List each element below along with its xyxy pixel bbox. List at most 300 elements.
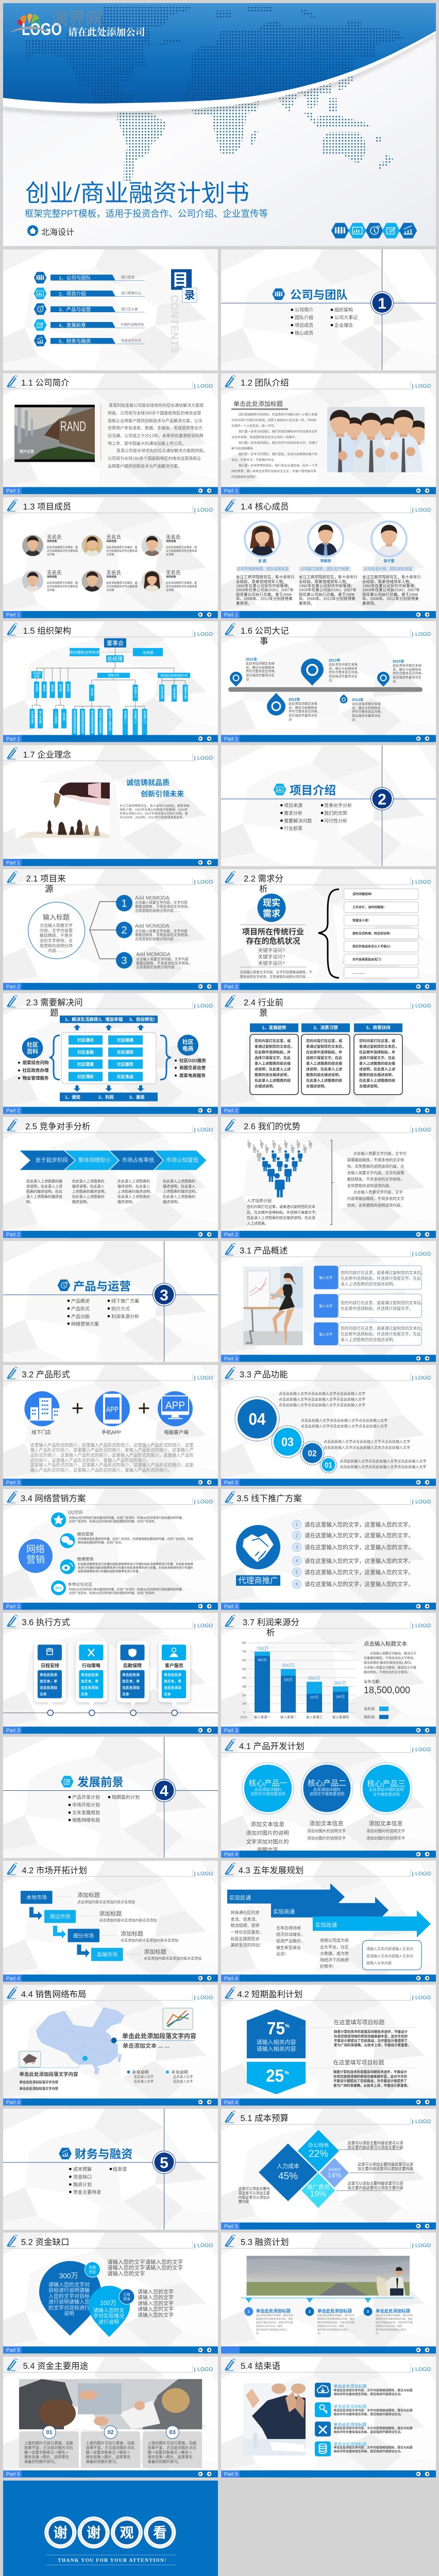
milestone text: 述，建议与标题相关 — [393, 668, 421, 672]
numbered list: 6 — [295, 1582, 298, 1587]
pain point boxes: ………… — [352, 972, 365, 975]
footer label: Part 2 — [224, 1108, 238, 1114]
column boxes: 录入上述图表的综合描 — [359, 1061, 395, 1066]
heading: 析 — [266, 1628, 275, 1638]
advantage text: 修饰，言简意赅的说明该项内容。 — [347, 1203, 404, 1208]
summary: 全年总额: — [364, 1679, 380, 1684]
member text: 议与标题相关并符合整体语 — [166, 549, 197, 553]
heading: 目录 — [171, 269, 197, 302]
panel: 3.4 online marketing — [3, 1489, 218, 1610]
logo label: LOGO — [415, 879, 431, 885]
heading: 5.4 资金主要用途 — [23, 2361, 88, 2371]
bar chart: 收入来源四 — [332, 1715, 349, 1719]
bar chart: 400 — [242, 1677, 246, 1680]
logo label: LOGO — [415, 2366, 431, 2372]
description boxes: 您的内容打在这里，或者通过复制您的文本后， — [341, 1270, 425, 1275]
step text: 单击此处添加标题 — [256, 2309, 291, 2314]
small pin: 100万 — [100, 2299, 116, 2307]
member text: 议与标题相关并符合整体语 — [166, 585, 197, 588]
large pin: 说明 — [64, 2310, 74, 2317]
logo label: LOGO — [415, 2119, 431, 2125]
panels: 键->设置对象格式->填充-> — [147, 2450, 192, 2455]
topic list: 产品开发计划 — [72, 1794, 100, 1800]
item text — [135, 895, 192, 970]
column text: 将使公司成为就 — [320, 1938, 349, 1943]
panel: 3.5 offline promotion — [221, 1489, 436, 1610]
column text: 促进产业融合， — [276, 1938, 305, 1943]
badge: 需求 — [263, 909, 280, 919]
note box: 请输入文本内容请输入文本内 — [366, 1946, 413, 1951]
org chart: 研发部 — [90, 688, 93, 697]
member avatars — [22, 535, 163, 591]
side text: 请输入您的文字 — [138, 2312, 174, 2318]
step text: 内。 — [256, 2332, 261, 2335]
column text: 催生新型商业 — [276, 1945, 301, 1950]
pain point boxes — [344, 889, 418, 978]
input bubble: 输入标题 — [43, 913, 70, 921]
step text: 添加标题 — [144, 1948, 166, 1955]
arrows: 实现商通 — [273, 1908, 295, 1915]
pain point boxes: 快递没人收! — [352, 918, 369, 922]
footer label: Part 4 — [224, 2100, 238, 2106]
column text: 业态! — [276, 1951, 285, 1956]
panels: 准备好的图片即可。 — [147, 2460, 181, 2464]
panels: 效果不变，方法是对图片点右 — [86, 2446, 134, 2450]
chevron process: 处于起步阶段 — [36, 1157, 68, 1163]
arrows: 实现民通 — [229, 1894, 251, 1901]
numbered list: 请在这里输入您的文字，这里输入您的文字。 — [305, 1532, 414, 1539]
descriptions: 图表的描述说明，在此 — [26, 1189, 62, 1194]
org chart: 营运部门② — [134, 710, 137, 724]
heading: 3.2 产品形式 — [22, 1369, 70, 1379]
topic list: 企业理念 — [334, 323, 353, 328]
logo label: LOGO — [197, 1375, 213, 1381]
member text: 议与标题相关并符合整体语 — [106, 549, 138, 553]
left column: 物业管理服务 — [23, 1076, 49, 1081]
names: 安 妮 — [258, 558, 266, 563]
cards: 文本 — [40, 1692, 47, 1697]
crisis text: 关键字设问? — [258, 947, 285, 954]
org chart: 营运部门③ — [143, 710, 146, 724]
topic list: 公司大事记 — [334, 314, 358, 320]
milestone text: 2012年 — [289, 697, 300, 702]
legend: · — [167, 2075, 168, 2079]
milestone text: 述，建议与标题相关 — [329, 667, 358, 671]
step text: 添加标题 — [121, 1930, 143, 1937]
logo label: LOGO — [197, 1499, 213, 1505]
timeline nodes — [47, 1710, 177, 1716]
feature text: 相关并符合整体语言风格，语言描述尽量简洁生动。 — [334, 2430, 403, 2434]
column text: 大数据，成为市 — [320, 1951, 349, 1956]
numbered list: 4 — [295, 1558, 298, 1563]
feature text: 单击此处添加文本内容，文字内容需概括精炼，建议与标题 — [334, 2409, 413, 2413]
left column: 社区政务办理 — [23, 1068, 49, 1073]
input bubble: 简意赅的说明分项 — [40, 943, 73, 948]
member text: 议与标题相关并符合整体语 — [106, 585, 138, 588]
footer label: Part 3 — [224, 1604, 238, 1609]
milestone text: 动 — [352, 718, 355, 722]
world map: upper dots — [26, 7, 403, 102]
panel: 2.6 advantages — [221, 1117, 436, 1238]
footer label: Part 2 — [224, 1232, 238, 1238]
talent plan text: 人才培养计划 — [247, 1198, 272, 1204]
legend — [364, 1706, 389, 1719]
footer label: Part 1 — [224, 488, 238, 494]
text columns: 说明文字 — [257, 1846, 278, 1853]
legend: 在此录入文字 — [173, 2074, 193, 2079]
panel: 4.1 product plan — [221, 1737, 436, 1858]
column text: 一体化社区服务， — [231, 1929, 264, 1935]
org chart: 特许授权合作伙伴 — [69, 650, 100, 655]
text columns: 添加对图片的说明 — [246, 1830, 289, 1837]
thank you badges: 谢 — [87, 2525, 100, 2540]
product circles: 核心产品二 — [308, 1779, 346, 1788]
portraits — [244, 520, 408, 557]
summary — [364, 1640, 416, 1696]
org chart: 采购部 — [51, 684, 54, 692]
footer label: Part 3 — [224, 1356, 238, 1362]
org chart: 前台事业部 — [31, 710, 34, 724]
cards: 加文本，单 — [40, 1679, 57, 1684]
text columns: 添加文本信息 — [369, 1820, 403, 1827]
thank you badges — [44, 2516, 176, 2548]
milestone text: 并符合整体语言风格， — [352, 709, 384, 714]
member text: 无名氏 — [47, 570, 62, 576]
descriptions: 描述说明，在此录入 — [72, 1184, 105, 1189]
column boxes: 合描述说明。 — [359, 1084, 381, 1089]
summary: 18,500,000 — [364, 1685, 410, 1696]
side text: 请输入您的文字 — [138, 2294, 174, 2301]
bios: 2003年任某公司执COO；2007年 — [362, 587, 420, 592]
numbered list: 请在这里输入您的文字，这里输入您的文字。 — [305, 1521, 414, 1528]
org chart: 市场部 — [33, 672, 41, 675]
diamond chart: 人力成本 — [277, 2162, 299, 2170]
detail text: 在这里填写项目标题 — [334, 2019, 384, 2026]
description boxes: 在此框中选择粘贴，并选择只保留文字。在此 — [341, 1276, 421, 1281]
bios: 业经验，是某领域领军人物。 — [236, 579, 287, 584]
crisis text: 存在的危机状况 — [246, 937, 300, 946]
top benefits bar: 1、解决生活麻烦 — [65, 1017, 98, 1022]
description boxes: 您的内容打在这里，或者通过复制您的文本后， — [341, 1326, 425, 1331]
milestone text: 语言描述尽量简洁生 — [329, 674, 358, 679]
topic list — [69, 2166, 127, 2195]
bios: 1992年在某公司担任中层管理； — [299, 583, 354, 588]
topic list: 产品功能 — [71, 1313, 90, 1319]
member text: 议与标题相关并符合整体语 — [47, 585, 78, 588]
talent plan text: 您的内容打在这里，或者通过复制您的文本 — [247, 1205, 315, 1209]
bar chart: 0 — [244, 1711, 245, 1715]
cards: 客户服务 — [165, 1663, 183, 1668]
bar chart: (万元) — [240, 1716, 247, 1719]
chevron process — [20, 1150, 207, 1170]
numbered list: 5 — [295, 1570, 298, 1575]
channel text: 利用QQ空间来进行朋友圈间的传播，达到广告目的。利用QQ空间来进行朋友圈间的传播， — [69, 1587, 184, 1591]
25 percent shield: % — [284, 2070, 289, 2076]
footer label: Part 2 — [6, 1108, 20, 1114]
pain point boxes: 对不良商家投诉无门! — [352, 957, 381, 961]
org chart: 智能管理系统研发部 — [81, 710, 84, 734]
market steps: 本地市场 — [26, 1894, 47, 1901]
heading: 景 — [259, 1009, 268, 1018]
member text: 项目经理 — [106, 575, 116, 579]
pointer line — [241, 2298, 414, 2302]
panel: 3.7 profit — [221, 1613, 436, 1734]
column boxes: 合描述说明。 — [255, 1084, 276, 1089]
column boxes: 者通过复制您的文本后， — [359, 1044, 399, 1049]
milestone text: 2015年 — [393, 659, 404, 664]
advantage text: 点击输入简要文字内容，文字内 — [353, 1151, 407, 1156]
cards: 击此处添加 — [122, 1685, 140, 1690]
channel text: 微信营销 — [77, 1531, 94, 1536]
callouts: 这里可以添加主要内容这里可以添 — [358, 2162, 413, 2167]
logo label: LOGO — [415, 383, 431, 389]
75 percent shield: 请输入相关内容 — [257, 2038, 296, 2045]
column boxes: 您的内容打在这里，或 — [359, 1039, 395, 1043]
text columns: 文字添加对图片的 — [246, 1839, 289, 1845]
item text: 点击输入简要文字内容，文字内容 — [136, 957, 189, 961]
side text: 请输入您的文字 — [138, 2289, 174, 2295]
heading: 4.1 产品开发计划 — [239, 1741, 305, 1751]
column boxes: 图表的综合描述说明， — [306, 1073, 342, 1077]
service grid: 社区服务 — [117, 1062, 133, 1067]
elbow arrows — [29, 1907, 90, 1957]
dotted arrows — [56, 1897, 141, 1955]
body text: 地上市，是中国最大的通信设备上市公司。 — [108, 441, 186, 446]
body text: 某某科技发展公司是全球领先的综合通信解决方案提 — [109, 403, 204, 408]
footer label: Part 3 — [224, 1728, 238, 1734]
photo: 图片位置 — [20, 449, 34, 454]
heading: 3.4 网络营销方案 — [21, 1494, 86, 1503]
footer label: Part 1 — [6, 488, 20, 494]
descriptions: 录入上述图表的描述说 — [26, 1194, 62, 1199]
large pin: 目标进行说明请输 — [48, 2287, 90, 2294]
milestone text: 并符合整体语言风格， — [393, 671, 425, 675]
column boxes: 图表的综合描述说明， — [255, 1073, 291, 1077]
callout right: 单击此处添加段落文字内容 — [122, 2032, 196, 2040]
panels: 03 — [170, 2430, 176, 2436]
logo label: LOGO — [415, 2243, 431, 2249]
column text: 金流、信息流、 — [231, 1917, 260, 1922]
bios: 年、2008年、2012年分别获得某 — [299, 596, 356, 601]
milestone text: 并符合整体语言风格， — [246, 669, 278, 673]
bios: 某奖项。 — [236, 601, 251, 606]
agent label: 代理商推广 — [238, 1576, 278, 1585]
bar chart: 650万 — [258, 1658, 267, 1662]
bracket — [330, 1140, 333, 1225]
channel text: 利用QQ空间来进行朋友圈间的传播，达到广告目的。利用QQ空间来进行朋友圈间的传播， — [69, 1516, 184, 1520]
logo label: LOGO — [415, 507, 431, 513]
bios: 1992年在某公司担任中层管理； — [236, 583, 292, 588]
bar chart: 700 — [242, 1651, 246, 1654]
service grid — [62, 1032, 156, 1084]
footer label: Part 1 — [224, 736, 238, 742]
footer label: Part 5 — [224, 2224, 238, 2230]
photo: RAND — [60, 419, 86, 434]
timeline — [3, 1713, 218, 1714]
column boxes: 选择只保留文字。在此 — [255, 1056, 291, 1060]
25 percent shield: 25 — [266, 2066, 284, 2086]
callout right: 单击添加文本 ... ... — [123, 2042, 169, 2049]
member text: 言风格 — [166, 553, 174, 556]
numbered list: 请在这里输入您的文字，这里输入您的文字。 — [305, 1569, 414, 1575]
org chart: 经理 — [34, 675, 40, 679]
bios: 长江工商学院研究生，有十余年行 — [236, 574, 295, 580]
panel: section 3 — [3, 1241, 218, 1362]
org chart: 营运部门① — [124, 710, 127, 724]
blue curved banner — [3, 3, 436, 104]
step text: 单击此处添加标题 — [317, 2309, 352, 2314]
center badge — [19, 1539, 53, 1573]
org chart: 无线电子系统研发部 — [99, 710, 102, 734]
panels — [19, 2426, 202, 2468]
callout left: 单击此处添加段落文字内容 — [20, 2079, 59, 2084]
column boxes: 在此框中选择粘贴，并 — [359, 1050, 395, 1055]
people pyramid — [247, 1140, 312, 1197]
white swoosh — [3, 31, 436, 112]
numbered list: 请在这里输入您的文字，这里输入您的文字。 — [305, 1544, 414, 1551]
cards: 文本 — [122, 1692, 129, 1697]
descriptions: 描述说明，在此录入 — [117, 1184, 150, 1189]
milestone text: 2014年 — [352, 697, 364, 702]
large pin: 入您的文字对目标 — [48, 2293, 90, 2300]
panels: 键->设置对象格式->填充-> — [86, 2450, 130, 2455]
descriptions: 在此录入上述图表的 — [117, 1179, 150, 1183]
titles: 公司市场部经理、团队运营总监 — [237, 567, 289, 571]
body text: 任某公司执COO；2007年担任某公司执行总裁。曾 — [120, 811, 188, 816]
names — [258, 558, 395, 563]
org chart: 通讯管理系统研发部 — [91, 710, 94, 734]
step text: 添加标题 — [99, 1910, 122, 1917]
callouts: 要内容 — [239, 2199, 249, 2204]
cards: 日程安排 — [41, 1663, 59, 1668]
function text: 点击此处输入文字点击此处输入文字点击此处输入文字 — [324, 1445, 410, 1450]
bios: 长江工商学院研究生，有十余年行 — [299, 574, 358, 580]
description boxes: 在此框中选择粘贴，并选择只保留文字。在此 — [341, 1331, 421, 1336]
feature text: 相关并符合整体语言风格，语言描述尽量简洁生动。 — [334, 2449, 403, 2453]
meeting photo — [19, 2379, 202, 2429]
bios: 1992年在某公司担任中层管理； — [362, 583, 418, 588]
logo label: LOGO — [415, 1375, 431, 1381]
logo label: LOGO — [415, 1747, 431, 1753]
channel text: 微信朋友圈间的传播，达到广告目。 — [78, 1540, 124, 1545]
step text: 描述尽量简洁生动，字数书写尽量 — [376, 2321, 413, 2325]
column headers — [250, 1023, 402, 1032]
callouts: 内容这里可以添加主 — [239, 2195, 270, 2200]
bar chart: 700万 — [257, 1646, 269, 1651]
step text: 内。 — [317, 2332, 323, 2335]
contents list: 4、发展前景 — [59, 323, 86, 329]
callouts — [239, 2141, 414, 2204]
column boxes: 在此框中选择粘贴，并 — [306, 1050, 342, 1055]
contents list: 我们要做什么 — [121, 291, 141, 295]
topic list: 网络营销方案 — [71, 1321, 99, 1327]
summary: 点击输入简要文字解说、解说文字尽量 — [364, 1666, 416, 1670]
heading: 2.1 项目来 — [26, 874, 66, 884]
callout right — [116, 2032, 196, 2049]
left column: 社区 — [27, 1041, 38, 1048]
member text: 此处添加两层文本描述，建 — [166, 546, 197, 549]
heading: 1.5 组织架构 — [23, 626, 71, 636]
milestone text: 述，建议与标题相关 — [246, 666, 275, 670]
column text — [231, 1910, 349, 1969]
logo label: LOGO — [197, 1623, 213, 1629]
body text: 公司将为全球160多个国家和地区的电信运营商和企 — [108, 456, 201, 461]
feature text: 相关并符合整体语言风格，语言描述尽量简洁生动。 — [334, 2392, 403, 2396]
diamond chart: 办公场地 — [308, 2142, 329, 2148]
body text: 输入产品形式的简介，这里输入产品形式的简介，里输入产品形式的简介。 — [30, 1467, 172, 1472]
label boxes — [314, 1266, 338, 1345]
cards: 加文本，单 — [164, 1679, 181, 1684]
subheading: 单击此处添加标题 — [233, 400, 283, 408]
step text: 此处添加详细文本描述，建议与标 — [317, 2314, 354, 2317]
member text: 无名氏 — [166, 534, 181, 540]
badge: 现实 — [263, 897, 280, 908]
icon: phone — [95, 1391, 130, 1426]
panel: section 4 — [3, 1737, 218, 1858]
topic list: 资金主要用途 — [73, 2189, 101, 2195]
logo label: LOGO — [197, 755, 213, 761]
text columns: 添加文本信息 — [250, 1821, 284, 1828]
step text: 单击此处添加标题 — [376, 2309, 411, 2314]
footer label: Part 3 — [224, 1480, 238, 1486]
top benefits bar — [60, 1015, 158, 1023]
note box: 容输入文本内容 — [366, 1960, 392, 1965]
panel: 5.4 closing — [221, 2357, 436, 2478]
service grid: 社区健康 — [77, 1062, 94, 1067]
function text: 点击此处输入文字点击此处输入文字点击此处输入文字 — [301, 1423, 387, 1428]
side text: 请输入您的文字请输入您的文字 — [107, 2264, 183, 2271]
advantage text: 言简意赅的说明该项内容。 — [347, 1183, 393, 1188]
descriptions: 上述图表的描述说明， — [72, 1189, 108, 1194]
step text: 描述尽量简洁生动，字数书写尽量 — [317, 2321, 354, 2325]
panel: 1.7 philosophy — [3, 745, 218, 866]
member text: 项目经理 — [47, 575, 57, 579]
logo label: LOGO — [197, 507, 213, 513]
column headers: 1、发展趋势 — [262, 1025, 286, 1030]
description boxes — [339, 1266, 425, 1345]
column boxes: 录入上述图表的综合描 — [306, 1061, 342, 1066]
milestone text: 此处添加详细文本描 — [352, 702, 381, 706]
text columns: 添加文本信息 — [309, 1820, 343, 1827]
channel text — [68, 1510, 193, 1595]
panels: 上面的图片可自行更换，动画 — [24, 2441, 73, 2446]
panel: section 1 — [221, 249, 436, 370]
contents vertical label: CONTENTS — [168, 295, 180, 353]
column boxes: 合描述说明。 — [306, 1084, 328, 1089]
bar chart: 420万 — [284, 1678, 293, 1682]
heading: 事 — [260, 636, 268, 646]
descriptions: 在此录入上述图表的 — [163, 1179, 195, 1183]
cards: 行动策略 — [82, 1663, 100, 1668]
advantage text: 内容需概括精炼，不用多余的文字 — [347, 1196, 404, 1201]
step text: 此处添加详细文本描述，建议与标 — [256, 2314, 293, 2317]
bar chart: 500万 — [282, 1663, 295, 1668]
names: 李斯特 — [320, 558, 331, 563]
panel: 1.4 core members — [221, 497, 436, 618]
org chart: 总经理 — [107, 655, 123, 662]
75 percent shield: % — [285, 2023, 290, 2029]
thank you badges: 看 — [153, 2525, 167, 2540]
org chart: 数控管理系统研发部 — [73, 710, 76, 734]
feature text: 单击此处添加文本内容，文字内容需概括精炼，建议与标题 — [334, 2446, 413, 2450]
body text: 我们是一支年轻的团队。我们的平均年龄仅有26岁，充满了 — [239, 441, 318, 445]
labels: 电脑客户端 — [164, 1429, 189, 1435]
service grid: 社区通讯 — [77, 1038, 94, 1043]
body text: 品形式的简介，这里输入产品形式的简介，这里输入产品形式的简介，这里输入产品形 — [30, 1452, 194, 1458]
column boxes: 述说明，在此录入上述 — [255, 1067, 291, 1072]
contents list: 3、产品与运营 — [59, 307, 91, 313]
diamond chart: 14% — [327, 2171, 342, 2179]
